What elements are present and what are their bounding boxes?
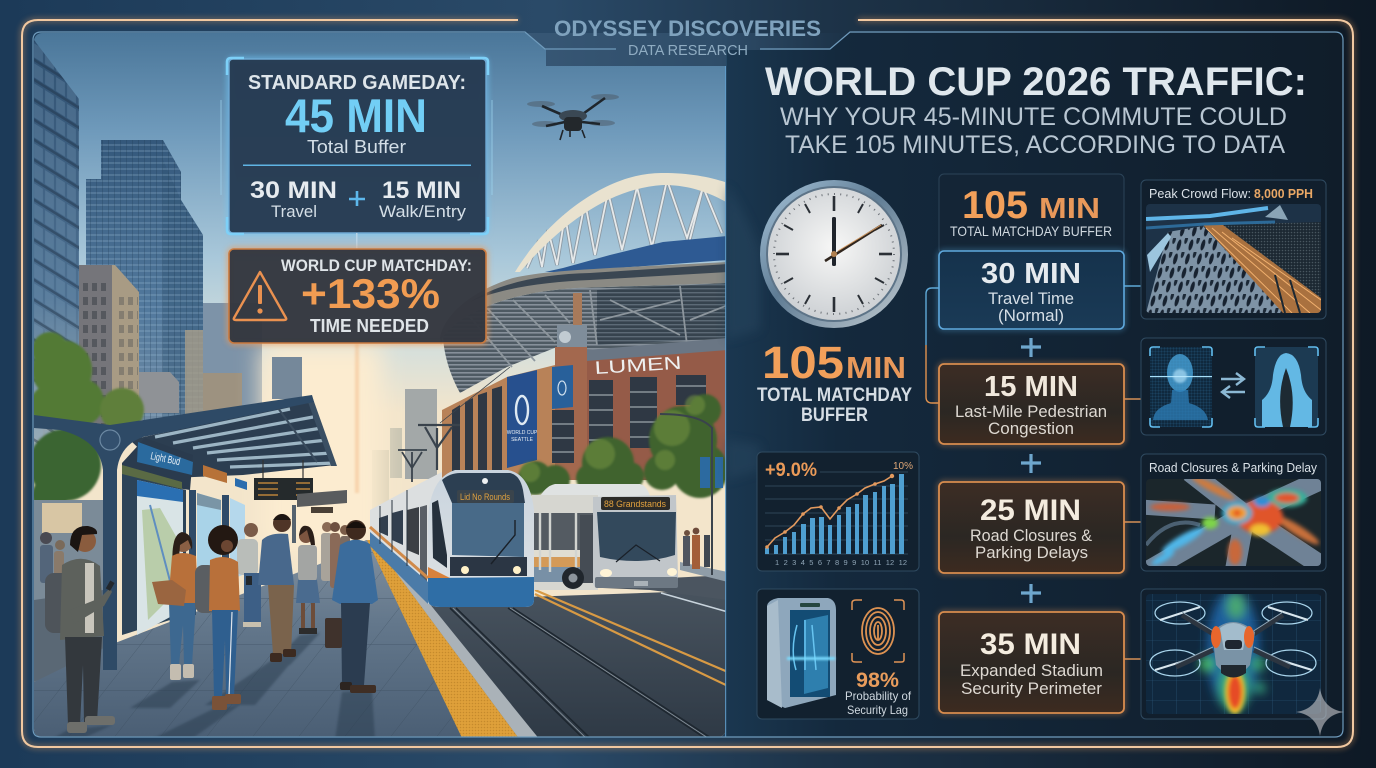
panel: road closures heatmap [1140,454,1326,572]
stat box: security: Security Perimeter [961,679,1102,698]
panel: data column background [726,33,1343,737]
figure: 30 min travel: Travel [271,202,317,221]
bus pedestrians [683,528,710,569]
banner: small [552,365,573,409]
stat box: security [939,612,1124,713]
bars [765,474,904,554]
stat box: travel time: Travel Time [988,289,1074,308]
stat box: road closures: Road Closures & [970,526,1093,545]
header: brand: ODYSSEY DISCOVERIES [554,16,821,41]
stat box: total: MIN [1039,193,1100,225]
sign: small blue [235,478,247,490]
stat box: last-mile: 15 MIN [984,371,1078,403]
banner: world cup: SEATTLE [511,437,534,443]
panel: security gate [757,589,919,719]
tram destination sign: Lid No Rounds [460,492,510,503]
building: central glass tower [86,140,203,420]
hazy distant buildings [203,303,402,510]
icon: fingerprint [852,600,904,662]
trees [29,332,728,513]
heading: STANDARD GAMEDAY: [248,72,466,94]
icon: body scan [1255,347,1318,427]
distant crowd [40,522,350,588]
briefcase [325,618,342,648]
title: WHY YOUR 45-MINUTE COMMUTE COULD [780,103,1287,131]
icon: scanner gate [767,598,836,708]
person: woman in skirt [296,526,320,634]
shelter [34,395,347,670]
person: man in denim jacket [258,514,296,662]
sign: light bud: Light Bud [149,450,181,468]
figure: 15 min walk [379,177,467,221]
panel: transit scene [29,33,728,740]
stadium underside seating [443,283,728,393]
banner: world cup: WORLD CUP [507,430,538,436]
panel: line and bar chart [757,452,919,571]
stat box: road closures: 25 MIN [980,494,1081,527]
chart max: 10% [893,460,913,472]
figure: total matchday buffer [757,337,912,426]
stat box: last-mile: Last-Mile Pedestrian [955,402,1107,421]
stat box: travel time: 30 MIN [981,258,1081,290]
image: drone over heatmap [1146,590,1321,714]
stadium blue roof [545,236,728,272]
stat box: total: TOTAL MATCHDAY BUFFER [950,223,1112,239]
stat box: travel time [939,251,1124,329]
stat box: last-mile: Congestion [988,419,1074,438]
departure board [254,460,313,500]
stat box: security: 35 MIN [980,628,1081,661]
person: man with backpack and phone [45,526,115,733]
light rail tram [370,470,534,607]
image: stadium concourse crowd [1146,204,1321,313]
figure: 45 min: 45 MIN [285,89,427,142]
header: brand [554,16,821,59]
header tab [526,33,850,66]
figure: 98 percent: 98% [856,669,899,692]
stat box: total: 105 [962,184,1028,227]
title [765,60,1307,159]
map display housing [122,438,245,635]
stadium truss [527,180,722,268]
panel: road closures heatmap: Road Closures & Parking Delay [1149,461,1318,475]
icon: face scan [1150,347,1212,427]
banner: world cup [507,370,538,468]
shelter post and beam [34,395,314,670]
stadium sign LUMEN: LUMEN [594,353,682,378]
road [430,592,726,736]
stadium brick facade [587,350,726,480]
tram platform [34,540,540,740]
label: probability: Probability of [845,689,912,703]
bus destination sign: 88 Grandstands [604,499,666,509]
person: foreground man in blue [325,520,378,693]
chart value: +9.0% [765,460,817,481]
title: WORLD CUP 2026 TRAFFIC: [765,60,1307,104]
figure: 15 min walk: Walk/Entry [379,202,467,221]
plus [1021,338,1041,357]
stat box: security: Expanded Stadium [960,661,1103,680]
stadium arch [515,173,728,272]
bus [532,484,678,590]
sunrise glow [262,345,382,550]
figure: total matchday buffer: TOTAL MATCHDAY [757,385,912,406]
sign: orange [203,465,227,483]
faint stadium ghost [726,185,760,480]
overhead poles [398,367,712,575]
stadium upper ring [440,262,728,345]
stat box: travel time: (Normal) [998,306,1064,325]
minute hand [825,225,882,261]
header: brand: DATA RESEARCH [628,43,748,59]
hour hand [832,217,836,266]
icon: clock [760,180,908,328]
figure: 15 min walk: 15 MIN [382,177,461,204]
stat box: last-mile [939,364,1124,444]
figure: total matchday buffer: BUFFER [801,405,868,426]
icon: sparkle watermark [1296,688,1344,736]
left background street [34,500,109,682]
plus [349,191,365,206]
figure: total matchday buffer: MIN [846,350,906,385]
plus [1021,584,1041,603]
panel: security gate: Security Lag [847,703,908,717]
tactile strip [367,540,520,740]
tote bag [152,580,186,606]
sign: light bud [137,442,193,475]
building: tan office block [79,265,139,440]
axis labels: 1 2 3 4 5 6 7 8 9 9 10 11 12 12 [775,558,907,567]
panel: drone heatmap [1141,589,1326,719]
panel: peak crowd flow [1141,180,1326,319]
figure: 30 min travel: 30 MIN [250,177,337,204]
panel: peak crowd flow: 8,000 PPH [1254,187,1313,201]
panel: standard gameday [221,58,492,234]
stat box: total [939,174,1124,254]
figure: total matchday buffer: 105 [762,337,844,388]
panel: peak crowd flow: Peak Crowd Flow: [1149,187,1251,201]
trend line [767,476,892,547]
person: woman with afro [195,525,252,710]
panel: world cup matchday [229,249,486,343]
connector bracket [926,286,1141,659]
stat box: road closures: Parking Delays [975,543,1088,562]
distant towers in glow [272,357,437,479]
sun beam connector [355,343,359,493]
person: woman with tote [152,532,198,680]
road markings [450,590,728,740]
connector [356,233,358,249]
shelter canopy [130,402,335,478]
shadows [50,633,375,740]
building: left glass tower [34,40,79,470]
stat box: road closures [939,482,1124,573]
icon: swap arrows [1221,373,1245,398]
label: time needed: TIME NEEDED [310,316,429,336]
figure: 30 min travel [250,177,337,221]
title: TAKE 105 MINUTES, ACCORDING TO DATA [785,131,1285,159]
person: woman back view [237,523,261,627]
panel: biometric scan [1141,338,1326,435]
gridlines [765,472,908,554]
drone [527,94,619,140]
image: intersection [1140,472,1325,572]
plus [1021,454,1041,473]
heading: WORLD CUP MATCHDAY: [281,256,472,275]
label: total buffer: Total Buffer [307,137,406,157]
figure: +133%: +133% [301,270,440,317]
stadium [440,173,728,480]
icon: warning triangle [234,272,286,320]
